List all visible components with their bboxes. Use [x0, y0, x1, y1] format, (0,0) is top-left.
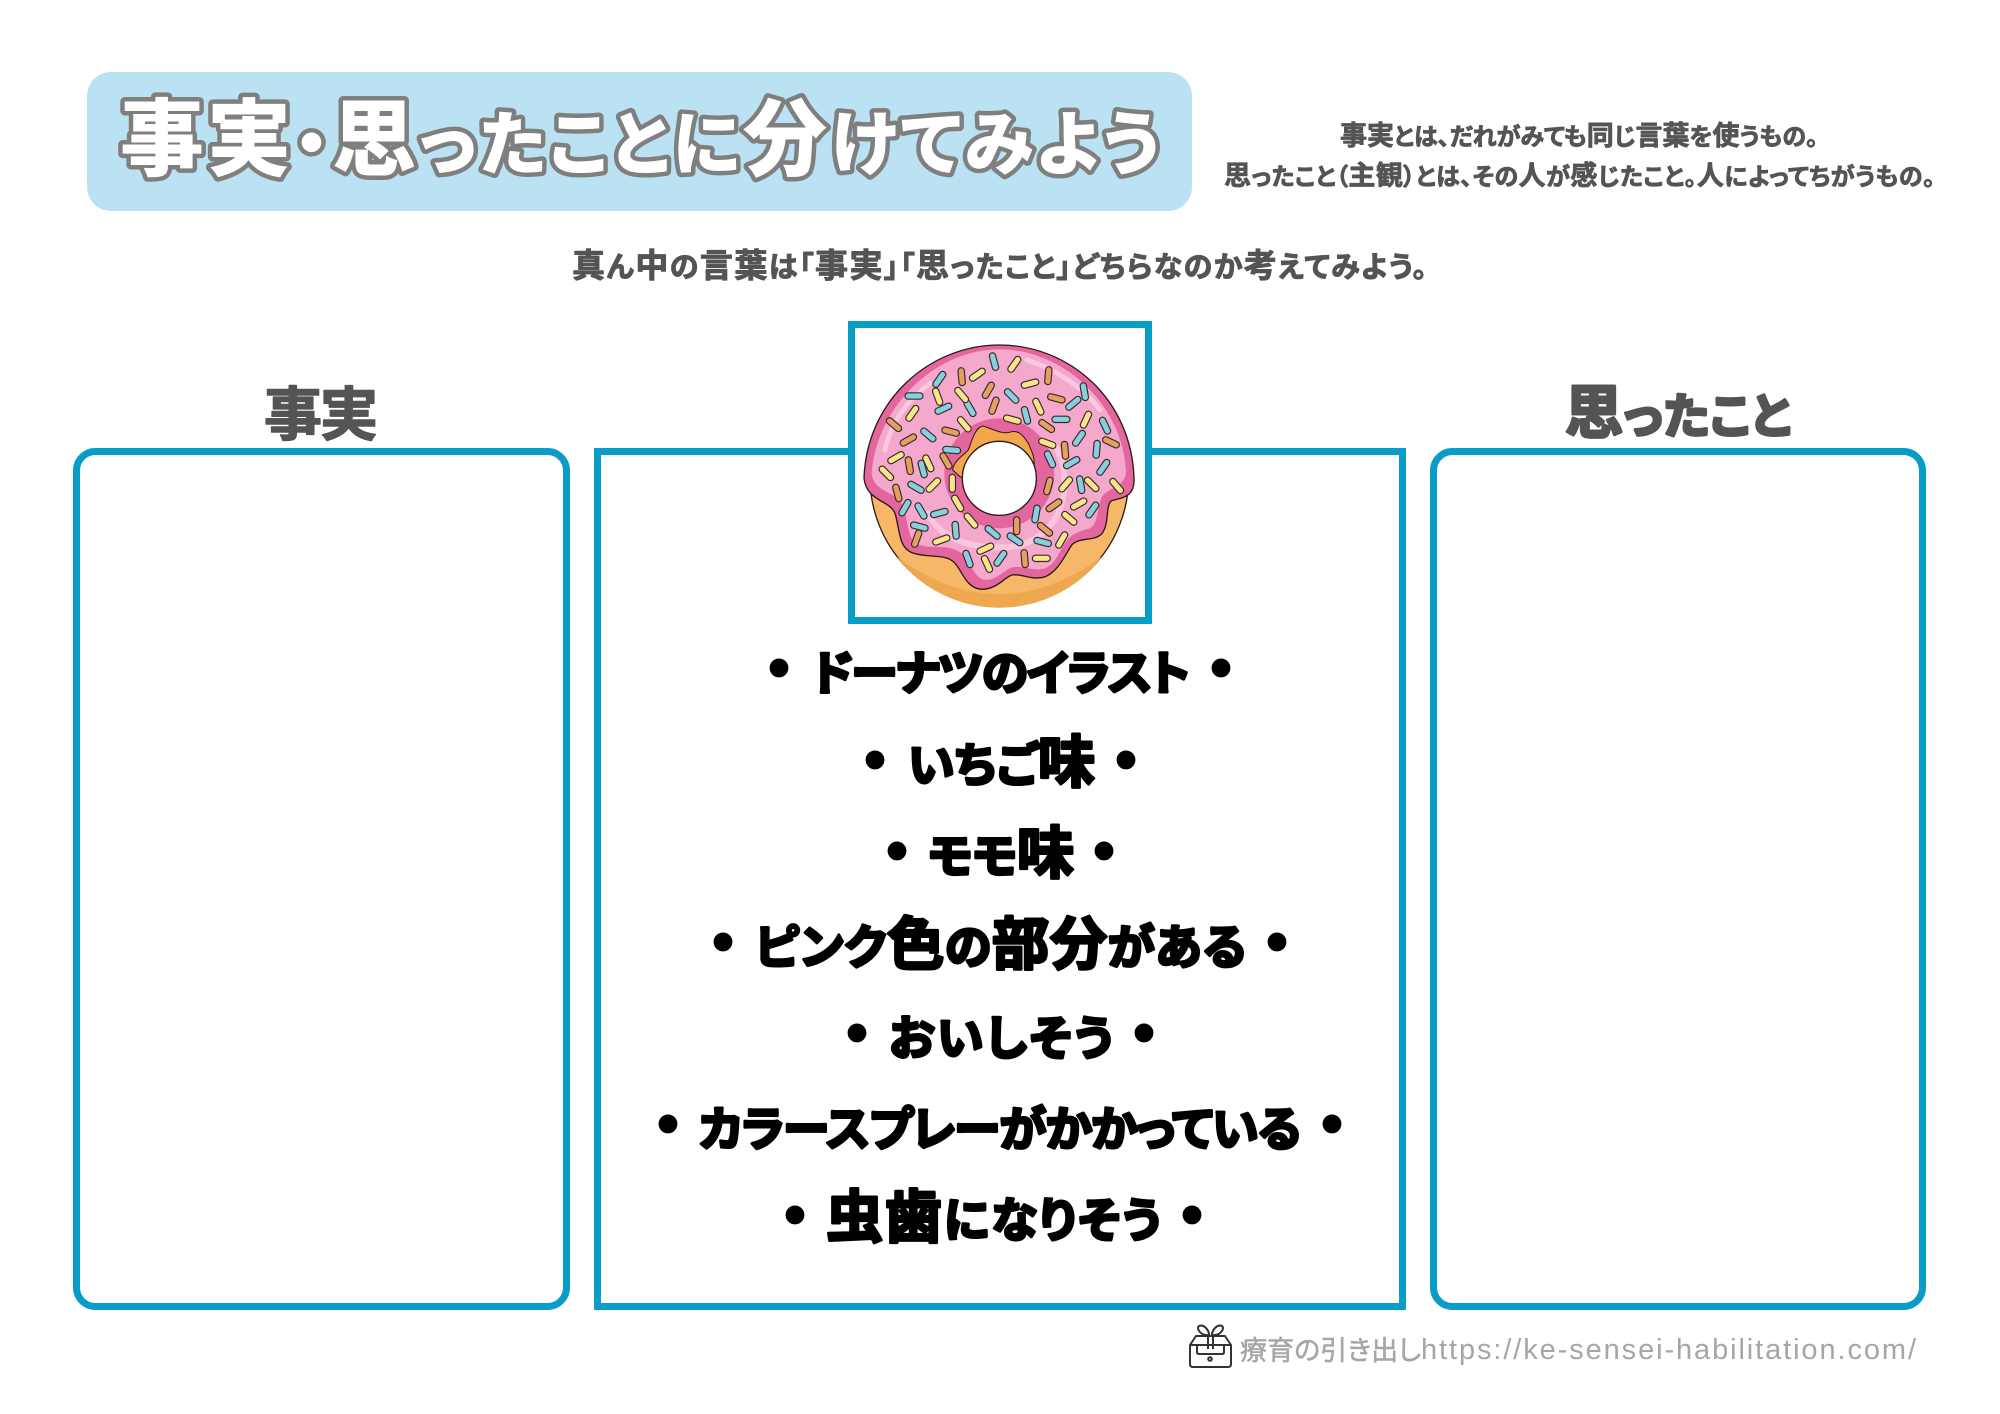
statement: donut illustration: ・: [764, 638, 794, 703]
panel: facts box: [76, 452, 566, 1306]
statement: peach flavor: ・: [1089, 821, 1119, 886]
statement: may cause cavities: ・: [780, 1185, 810, 1250]
statement: peach flavor: [882, 821, 1119, 886]
title banner: [87, 72, 1192, 211]
icon: gift drawer with sprout: [1190, 1326, 1231, 1367]
heading: opinions: 思ったこと: [1565, 381, 1791, 446]
statement: colored sprinkles: ・: [653, 1094, 683, 1159]
statement: has pink part: ・: [1262, 912, 1292, 977]
statement: colored sprinkles: カラースプレーがかかっている: [699, 1103, 1301, 1156]
statement: donut illustration: ・: [1206, 638, 1236, 703]
footer credit: 療育の引き出し: [1240, 1336, 1421, 1366]
statement: has pink part: ・: [708, 912, 738, 977]
definition text: [1224, 121, 1935, 191]
heading: facts: 事実: [264, 383, 378, 448]
statement: looks tasty: ・: [1129, 1003, 1159, 1068]
icon: donut illustration: [863, 344, 1135, 608]
statement: strawberry flavor: ・: [860, 730, 890, 795]
statement: strawberry flavor: ・: [1111, 730, 1141, 795]
sprinkles: yellow: [878, 355, 1125, 573]
statement: looks tasty: ・: [842, 1003, 872, 1068]
definition text: 思ったこと（主観）とは、その人が感じたこと。人によってちがうもの。: [1224, 161, 1935, 191]
title text: 事実・思ったことに分けてみよう: [120, 93, 1160, 187]
sprinkles: blue: [898, 352, 1112, 569]
instruction text: 真ん中の言葉は「事実」「思ったこと」どちらなのか考えてみよう。: [572, 247, 1427, 284]
footer credit: https://ke-sensei-habilitation.com/: [1421, 1334, 1917, 1366]
statement: looks tasty: おいしそう: [889, 1012, 1113, 1065]
statement: colored sprinkles: ・: [1317, 1094, 1347, 1159]
sprinkles: orange: [885, 366, 1120, 568]
statement: donut illustration: ドーナツのイラスト: [812, 647, 1190, 700]
statement: donut illustration: [764, 638, 1236, 703]
statement: peach flavor: モモ味: [928, 822, 1074, 886]
statement: strawberry flavor: [860, 730, 1141, 795]
panel: statements box: [598, 452, 1402, 1306]
statement: peach flavor: ・: [882, 821, 912, 886]
image frame: [852, 324, 1148, 620]
statement: strawberry flavor: いちご味: [908, 731, 1095, 795]
statement: may cause cavities: 虫歯になりそう: [826, 1186, 1161, 1250]
statement: has pink part: ピンク色の部分がある: [755, 913, 1246, 977]
panel: opinions box: [1434, 452, 1922, 1306]
statement: looks tasty: [842, 1003, 1159, 1068]
definition text: 事実とは、だれがみても同じ言葉を使うもの。: [1340, 121, 1818, 151]
statement: may cause cavities: ・: [1177, 1185, 1207, 1250]
